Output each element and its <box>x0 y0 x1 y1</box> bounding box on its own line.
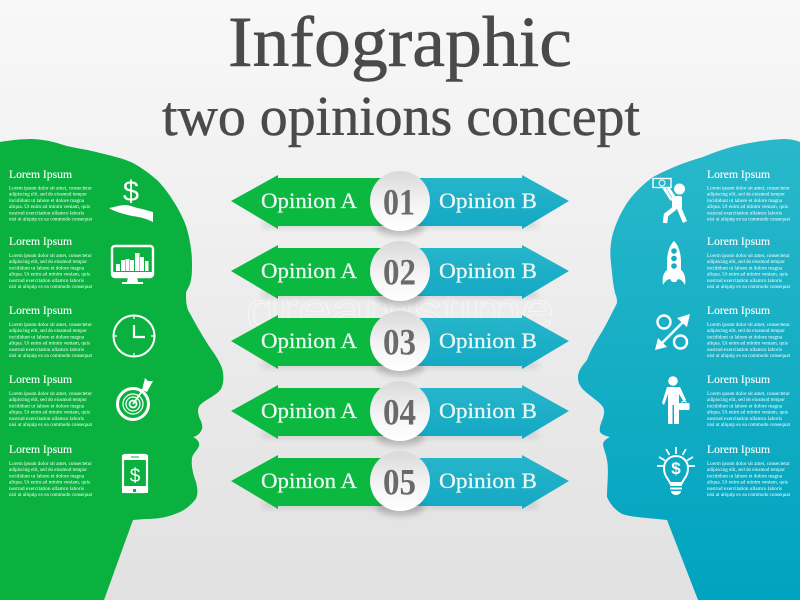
label A: Opinion A <box>261 328 358 353</box>
right text block 1: incididunt ut labore et dolore magna <box>707 199 783 204</box>
label B: Opinion B <box>439 398 537 423</box>
shadow <box>262 222 538 228</box>
left head silhouette <box>0 139 223 600</box>
right text block 3: nisi ut aliquip ex ea commodo consequat <box>707 354 791 359</box>
right text block 1: nostrud exercitation ullamco laboris <box>707 211 782 216</box>
right text block 2: adipiscing elit, sed do eiusmod tempor <box>707 260 785 265</box>
number disc <box>370 451 430 511</box>
number: 04 <box>383 392 416 434</box>
right text block 4: nisi ut aliquip ex ea commodo consequat <box>707 423 791 428</box>
title: Infographic <box>228 2 572 82</box>
shadow <box>262 502 538 508</box>
right text block 3: nostrud exercitation ullamco laboris <box>707 348 782 353</box>
left text block 3: Lorem Ipsum <box>9 305 72 317</box>
left text block 4: aliqua. Ut enim ad minim veniam, quis <box>9 411 90 416</box>
arrow: opinion B <box>400 455 569 509</box>
disc shadow <box>376 290 424 306</box>
left text block 4: Lorem ipsum dolor sit amet, consectetur <box>9 392 92 397</box>
right text block 4: aliqua. Ut enim ad minim veniam, quis <box>707 411 788 416</box>
icon: hand with dollar: $ <box>123 176 139 208</box>
left text block 2: aliqua. Ut enim ad minim veniam, quis <box>9 273 90 278</box>
left text block 2: Lorem Ipsum <box>9 236 72 248</box>
left text block 1 <box>9 169 93 222</box>
right text block 2: aliqua. Ut enim ad minim veniam, quis <box>707 273 788 278</box>
left text block 5: adipiscing elit, sed do eiusmod tempor <box>9 468 87 473</box>
label A: Opinion A <box>261 258 358 283</box>
label B: Opinion B <box>439 328 537 353</box>
right text block 2: nisi ut aliquip ex ea commodo consequat <box>707 285 791 290</box>
disc shadow <box>376 500 424 516</box>
option row 01 <box>231 171 569 236</box>
number: 01 <box>383 182 415 224</box>
number: 05 <box>383 462 416 504</box>
label A: Opinion A <box>261 188 358 213</box>
right text block 2: Lorem Ipsum <box>707 236 770 248</box>
right text block 2 <box>707 236 791 290</box>
left text block 5: nostrud exercitation ullamco laboris <box>9 487 84 492</box>
right text block 4: Lorem ipsum dolor sit amet, consectetur <box>707 392 790 397</box>
left text block 3: aliqua. Ut enim ad minim veniam, quis <box>9 342 90 347</box>
left text block 2: adipiscing elit, sed do eiusmod tempor <box>9 260 87 265</box>
arrow: opinion B <box>400 245 569 299</box>
right text block 1: nisi ut aliquip ex ea commodo consequat <box>707 218 791 222</box>
right head silhouette <box>578 139 800 600</box>
left text block 2: Lorem ipsum dolor sit amet, consectetur <box>9 254 92 259</box>
arrow: opinion A <box>231 175 400 229</box>
label B: Opinion B <box>439 468 537 493</box>
right text block 3 <box>707 305 791 359</box>
watermark: dreamstime <box>246 282 554 340</box>
right text block 4: nostrud exercitation ullamco laboris <box>707 417 782 422</box>
arrow: opinion B <box>400 385 569 439</box>
icon: percent arrows <box>655 314 690 350</box>
left text block 5: nisi ut aliquip ex ea commodo consequat <box>9 493 93 498</box>
label A: Opinion A <box>261 468 358 493</box>
left text block 4: nostrud exercitation ullamco laboris <box>9 417 84 422</box>
title <box>162 2 640 148</box>
right text block 1 <box>707 169 791 222</box>
icon: monitor with bar chart <box>112 246 153 284</box>
number disc <box>370 311 430 371</box>
right text block 3: adipiscing elit, sed do eiusmod tempor <box>707 329 785 334</box>
left text block 3: adipiscing elit, sed do eiusmod tempor <box>9 329 87 334</box>
left text block 5: Lorem ipsum dolor sit amet, consectetur <box>9 462 92 467</box>
option row 05 <box>231 451 569 516</box>
label A: Opinion A <box>261 398 358 423</box>
disc shadow <box>376 430 424 446</box>
left text block 1: nostrud exercitation ullamco laboris <box>9 211 84 216</box>
right text block 2: nostrud exercitation ullamco laboris <box>707 279 782 284</box>
option row 02 <box>231 241 569 306</box>
left text block 5: incididunt ut labore et dolore magna <box>9 474 85 479</box>
right text block 5: aliqua. Ut enim ad minim veniam, quis <box>707 481 788 486</box>
right text block 4: Lorem Ipsum <box>707 374 770 386</box>
shadow <box>262 362 538 368</box>
right text block 5: nostrud exercitation ullamco laboris <box>707 487 782 492</box>
left text block 1: Lorem ipsum dolor sit amet, consectetur <box>9 186 92 192</box>
number disc <box>370 241 430 301</box>
left text block 3: nostrud exercitation ullamco laboris <box>9 348 84 353</box>
number: 03 <box>383 322 416 364</box>
left text block 2: incididunt ut labore et dolore magna <box>9 266 85 271</box>
number disc <box>370 171 430 231</box>
right text block 3: aliqua. Ut enim ad minim veniam, quis <box>707 342 788 347</box>
option row 03 <box>231 311 569 376</box>
number disc <box>370 381 430 441</box>
left text block 3: incididunt ut labore et dolore magna <box>9 335 85 340</box>
shadow <box>262 432 538 438</box>
shadow <box>262 292 538 298</box>
right text block 1: adipiscing elit, sed do eiusmod tempor <box>707 193 785 198</box>
right text block 2: incididunt ut labore et dolore magna <box>707 266 783 271</box>
left text block 3 <box>9 305 93 359</box>
right text block 5: Lorem Ipsum <box>707 444 770 456</box>
left text block 1: Lorem Ipsum <box>9 169 72 181</box>
left text block 4: incididunt ut labore et dolore magna <box>9 404 85 409</box>
right text block 4: adipiscing elit, sed do eiusmod tempor <box>707 398 785 403</box>
left text block 4: nisi ut aliquip ex ea commodo consequat <box>9 423 93 428</box>
icon: light bulb with dollar: $ <box>671 459 681 478</box>
right text block 5: nisi ut aliquip ex ea commodo consequat <box>707 493 791 498</box>
right text block 5: incididunt ut labore et dolore magna <box>707 474 783 479</box>
left text block 4: Lorem Ipsum <box>9 374 72 386</box>
icon: target with arrow <box>118 378 153 420</box>
right text block 3: Lorem Ipsum <box>707 305 770 317</box>
left text block 3: Lorem ipsum dolor sit amet, consectetur <box>9 323 92 328</box>
left text block 1: incididunt ut labore et dolore magna <box>9 199 85 204</box>
left text block 1: aliqua. Ut enim ad minim veniam, quis <box>9 205 90 210</box>
arrow: opinion B <box>400 315 569 369</box>
right text block 5: adipiscing elit, sed do eiusmod tempor <box>707 468 785 473</box>
number: 02 <box>383 252 416 294</box>
left text block 4 <box>9 374 93 428</box>
right text block 3: Lorem ipsum dolor sit amet, consectetur <box>707 323 790 328</box>
right text block 1: Lorem ipsum dolor sit amet, consectetur <box>707 186 790 192</box>
left text block 5 <box>9 444 93 498</box>
icon: light bulb with dollar <box>657 447 695 495</box>
right text block 1: Lorem Ipsum <box>707 169 770 181</box>
left text block 3: nisi ut aliquip ex ea commodo consequat <box>9 354 93 359</box>
disc shadow <box>376 220 424 236</box>
icon: businessman <box>662 376 690 424</box>
left text block 1: nisi ut aliquip ex ea commodo consequat <box>9 218 93 222</box>
right text block 1: aliqua. Ut enim ad minim veniam, quis <box>707 205 788 210</box>
left text block 2: nisi ut aliquip ex ea commodo consequat <box>9 285 93 290</box>
arrow: opinion A <box>231 315 400 369</box>
right text block 2: Lorem ipsum dolor sit amet, consectetur <box>707 254 790 259</box>
right text block 5 <box>707 444 791 498</box>
icon: smartphone with dollar <box>122 455 148 493</box>
icon: man lifting money <box>653 178 685 223</box>
option row 04 <box>231 381 569 446</box>
left text block 2: nostrud exercitation ullamco laboris <box>9 279 84 284</box>
right text block 3: incididunt ut labore et dolore magna <box>707 335 783 340</box>
arrow: opinion A <box>231 385 400 439</box>
left text block 5: Lorem Ipsum <box>9 444 72 456</box>
title: two opinions concept <box>162 86 640 148</box>
right text block 4 <box>707 374 791 428</box>
left text block 2 <box>9 236 93 290</box>
icon: clock <box>114 316 154 356</box>
left text block 1: adipiscing elit, sed do eiusmod tempor <box>9 193 87 198</box>
label B: Opinion B <box>439 188 537 213</box>
arrow: opinion B <box>400 175 569 229</box>
left text block 4: adipiscing elit, sed do eiusmod tempor <box>9 398 87 403</box>
left text block 5: aliqua. Ut enim ad minim veniam, quis <box>9 481 90 486</box>
arrow: opinion A <box>231 245 400 299</box>
icon: rocket <box>663 241 685 285</box>
right text block 5: Lorem ipsum dolor sit amet, consectetur <box>707 462 790 467</box>
arrow: opinion A <box>231 455 400 509</box>
label B: Opinion B <box>439 258 537 283</box>
icon: hand with dollar <box>109 176 153 222</box>
icon: smartphone with dollar: $ <box>130 466 141 487</box>
disc shadow <box>376 360 424 376</box>
right text block 4: incididunt ut labore et dolore magna <box>707 404 783 409</box>
